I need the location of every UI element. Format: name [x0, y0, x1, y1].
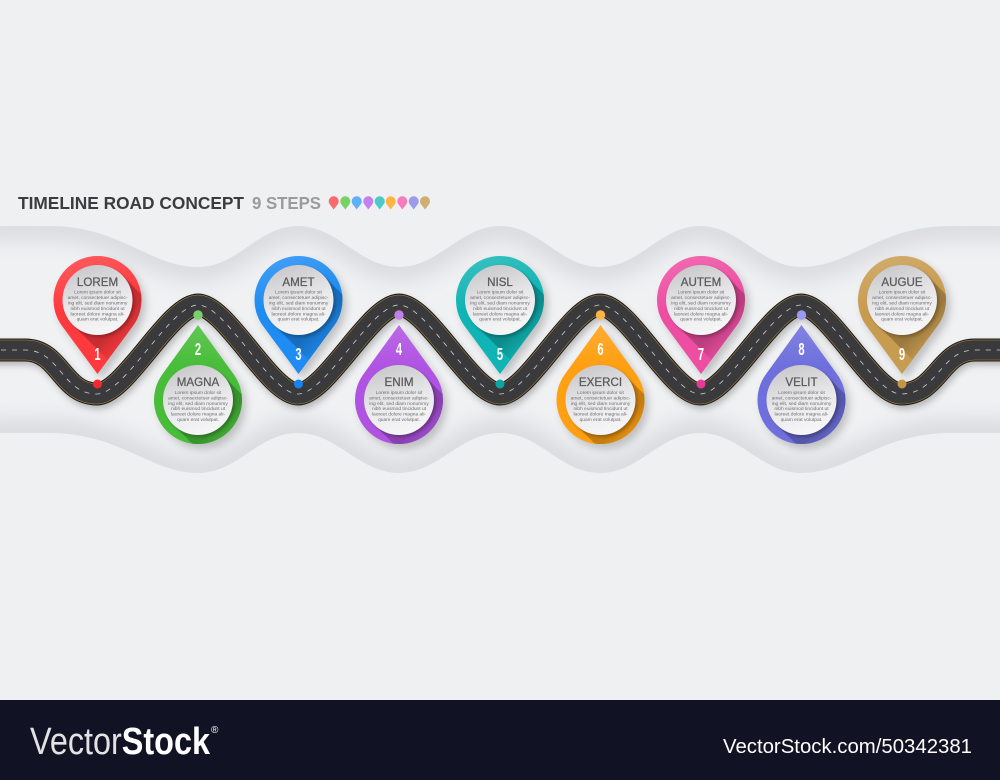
pin 4: ENIM: amet, consectetuer adipisc- [369, 395, 429, 401]
pin 5: NISL: NISL [487, 276, 513, 289]
pin 7: AUTEM: 7 [698, 344, 704, 365]
pin 6: EXERCI [556, 310, 652, 452]
pin 5: NISL: Lorem ipsum dolor sit [477, 290, 524, 296]
pin 4: ENIM: quam erat volutpat. [378, 417, 420, 423]
pin 6: EXERCI: ing elit, sed diam nonummy [571, 401, 631, 407]
pin 1: LOREM: ing elit, sed diam nonummy [68, 300, 128, 306]
pin 6: EXERCI: amet, consectetuer adipisc- [571, 395, 631, 401]
pin 2: MAGNA: Lorem ipsum dolor sit [175, 390, 222, 396]
pin 3: AMET: ing elit, sed diam nonummy [269, 300, 329, 306]
pin 2: MAGNA: ing elit, sed diam nonummy [168, 401, 228, 407]
wavy shaded background band [0, 225, 1000, 475]
pin 5: NISL: nibh euismod tincidunt ut [473, 306, 528, 312]
winding road [0, 305, 1000, 398]
pin 9: AUGUE: laoreet dolore magna ali- [875, 311, 929, 317]
pin 5: NISL: quam erat volutpat. [479, 317, 521, 323]
pin 1: LOREM: nibh euismod tincidunt ut [70, 306, 125, 312]
pin 4: ENIM [355, 310, 450, 452]
pin 3: AMET: nibh euismod tincidunt ut [271, 306, 326, 312]
pin 2: MAGNA: laoreet dolore magna ali- [171, 412, 225, 418]
pin 8: VELIT: VELIT [785, 376, 818, 389]
pin 2: MAGNA: quam erat volutpat. [177, 417, 219, 423]
pin 4: ENIM: ing elit, sed diam nonummy [369, 401, 429, 407]
infographic canvas [0, 196, 1000, 780]
pin 3: AMET [254, 256, 350, 388]
pin 7: AUTEM: amet, consectetuer adipisc- [671, 295, 731, 301]
pin 9: AUGUE: amet, consectetuer adipisc- [872, 295, 932, 301]
pin 6: EXERCI: EXERCI [579, 376, 622, 389]
footer bar [0, 700, 1000, 780]
footer logo: ® [211, 725, 219, 736]
pin 1: LOREM: LOREM [77, 276, 118, 289]
pin 8: VELIT: nibh euismod tincidunt ut [774, 406, 829, 412]
pin 9: AUGUE [858, 256, 954, 388]
pin 5: NISL [456, 256, 552, 388]
pin 7: AUTEM: nibh euismod tincidunt ut [674, 306, 729, 312]
pin 3: AMET: 3 [295, 344, 302, 365]
pin 7: AUTEM: ing elit, sed diam nonummy [671, 300, 731, 306]
pin 6: EXERCI: Lorem ipsum dolor sit [577, 390, 625, 396]
pin 9: AUGUE: Lorem ipsum dolor sit [879, 290, 926, 296]
pin 3: AMET: Lorem ipsum dolor sit [275, 290, 323, 296]
pin 4: ENIM: 4 [396, 339, 403, 360]
pin 2: MAGNA: nibh euismod tincidunt ut [171, 406, 226, 412]
pin 5: NISL: laoreet dolore magna ali- [473, 311, 527, 317]
footer image id: VectorStock.com/50342381 [723, 736, 972, 758]
pin 5: NISL: ing elit, sed diam nonummy [470, 300, 530, 306]
pin 2: MAGNA: 2 [195, 339, 201, 360]
pin 7: AUTEM: quam erat volutpat. [680, 317, 722, 323]
pin 7: AUTEM: AUTEM [681, 276, 721, 289]
pin 8: VELIT: ing elit, sed diam nonummy [772, 401, 832, 407]
pin 1: LOREM: laoreet dolore magna ali- [70, 311, 125, 317]
pin 3: AMET: amet, consectetuer adipisc- [269, 295, 329, 301]
pin 2: MAGNA: MAGNA [177, 376, 220, 389]
pin 6: EXERCI: quam erat volutpat. [580, 417, 621, 423]
pin 7: AUTEM: laoreet dolore magna ali- [674, 311, 728, 317]
pin 3: AMET: quam erat volutpat. [278, 317, 319, 323]
pin 8: VELIT: quam erat volutpat. [781, 417, 822, 423]
pin 3: AMET: laoreet dolore magna ali- [271, 311, 326, 317]
pin 7: AUTEM: Lorem ipsum dolor sit [678, 290, 725, 296]
pin 9: AUGUE: ing elit, sed diam nonummy [872, 300, 932, 306]
pin 2: MAGNA [154, 310, 250, 452]
pin 8: VELIT [758, 310, 853, 452]
pin 5: NISL: amet, consectetuer adipisc- [470, 295, 530, 301]
pin 1: LOREM [54, 256, 149, 388]
pin 8: VELIT: laoreet dolore magna ali- [774, 412, 829, 418]
footer logo: VectorStock [30, 721, 211, 763]
pin 2: MAGNA: amet, consectetuer adipisc- [168, 395, 228, 401]
title: TIMELINE ROAD CONCEPT [18, 193, 244, 213]
legend: row of nine mini pins [329, 196, 430, 210]
pin 5: NISL: 5 [497, 344, 503, 365]
pin 8: VELIT: 8 [798, 339, 805, 360]
pin 6: EXERCI: laoreet dolore magna ali- [573, 412, 628, 418]
pin 4: ENIM: nibh euismod tincidunt ut [372, 406, 427, 412]
pin 8: VELIT: amet, consectetuer adipisc- [772, 395, 832, 401]
pin 6: EXERCI: 6 [597, 339, 604, 360]
pin 9: AUGUE: AUGUE [881, 276, 923, 289]
pin 1: LOREM: amet, consectetuer adipisc- [68, 295, 128, 301]
pin 6: EXERCI: nibh euismod tincidunt ut [573, 406, 628, 412]
pin 3: AMET: AMET [282, 276, 315, 289]
pin 9: AUGUE: 9 [899, 344, 905, 365]
pin 4: ENIM: Lorem ipsum dolor sit [376, 390, 423, 396]
pin 1: LOREM: Lorem ipsum dolor sit [74, 290, 122, 296]
pin 9: AUGUE: nibh euismod tincidunt ut [875, 306, 930, 312]
pin 4: ENIM: ENIM [385, 376, 413, 389]
title: 9 STEPS [252, 193, 321, 213]
pin 1: LOREM: quam erat volutpat. [77, 317, 118, 323]
pin 7: AUTEM [657, 256, 752, 388]
pin 8: VELIT: Lorem ipsum dolor sit [778, 390, 826, 396]
pin 4: ENIM: laoreet dolore magna ali- [372, 412, 426, 418]
pin 1: LOREM: 1 [94, 344, 101, 365]
pin 9: AUGUE: quam erat volutpat. [881, 317, 923, 323]
